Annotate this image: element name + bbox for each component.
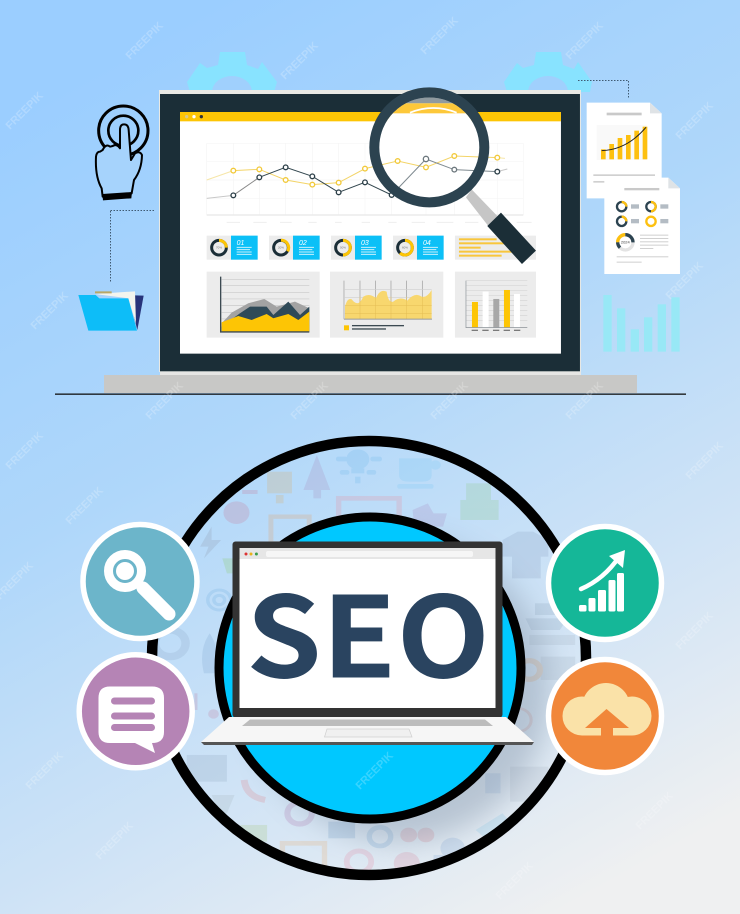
- magnifier frame and handle: [374, 92, 536, 264]
- watermarks: FREEPIK: [674, 100, 716, 142]
- summary card 3: 03: [361, 240, 369, 247]
- watermarks: FREEPIK: [4, 430, 46, 472]
- summary card 3: 50%: [340, 246, 346, 250]
- outer black ring: [152, 441, 586, 875]
- icon: printer: [328, 822, 355, 838]
- summary card 4: 60%: [402, 246, 408, 250]
- desk line: [55, 394, 686, 395]
- summary card 2: [269, 236, 320, 260]
- icon: person: [434, 838, 465, 865]
- summary card 4: 04: [423, 240, 431, 247]
- soft shadow of inner circle: [250, 538, 550, 842]
- icon: webcam: [155, 630, 186, 657]
- icon: shirt: [502, 532, 548, 578]
- SEO heading: SEO: [246, 548, 490, 710]
- watermarks: FREEPIK: [564, 20, 606, 62]
- icon: ship: [526, 604, 563, 630]
- screen: [240, 559, 496, 708]
- icon: green cup: [222, 558, 240, 573]
- badge: chat: [79, 655, 192, 768]
- summary card 3: [331, 236, 382, 260]
- watermarks: FREEPIK: [674, 610, 716, 652]
- icon: red circle: [394, 852, 420, 868]
- connector: laptop to document: [578, 80, 628, 98]
- badge: search: [83, 524, 197, 638]
- watermarks: FREEPIK: [494, 860, 536, 902]
- watermarks: FREEPIK: [4, 90, 46, 132]
- icon: orange frame: [282, 843, 324, 870]
- connector: hand to folder: [110, 210, 154, 283]
- inner blue circle: [219, 517, 521, 819]
- icon: lamp: [212, 795, 235, 813]
- summary card 5: horizontal bars: [455, 236, 536, 260]
- watermarks: FREEPIK: [664, 260, 706, 302]
- icon: tree: [303, 455, 330, 498]
- icon: rising bars and arrow: [579, 550, 625, 612]
- icon: lightning: [200, 527, 221, 558]
- watermarks: FREEPIK: [564, 380, 606, 422]
- icon: clock: [347, 851, 371, 872]
- icon: speech bubble: [98, 686, 164, 753]
- watermarks: FREEPIK: [124, 20, 166, 62]
- icon: cake: [240, 825, 267, 842]
- summary card 4: [393, 236, 444, 260]
- icon: phone: [244, 780, 265, 800]
- watermarks: FREEPIK: [419, 15, 461, 57]
- line chart: yellow series: [207, 154, 505, 187]
- faint icon pattern inside ring: [155, 449, 575, 875]
- dashboard title bar: [180, 112, 561, 121]
- summary card 1: 01: [237, 240, 245, 247]
- document: donut report: [604, 178, 680, 274]
- icon: grid: [510, 767, 548, 802]
- watermarks: FREEPIK: [64, 485, 106, 527]
- laptop screen with dashboard: [159, 90, 581, 372]
- icon: folder: [78, 291, 144, 331]
- icon: awning: [529, 635, 575, 680]
- icon: headset: [287, 803, 312, 824]
- icon: gift: [271, 517, 309, 543]
- icon: signal rings right: [504, 708, 531, 732]
- icon: light bulb: [336, 449, 382, 483]
- icon: rocket: [202, 633, 217, 673]
- badge: cloud upload: [548, 660, 662, 772]
- icon: bag: [187, 755, 227, 782]
- line chart grid: [207, 143, 532, 222]
- bar chart: columns: [455, 272, 536, 338]
- summary card 2: 20%: [278, 246, 284, 250]
- area chart: mountains: [207, 272, 320, 338]
- icon: tapping hand: [96, 106, 148, 200]
- watermarks: FREEPIK: [289, 380, 331, 422]
- area chart: yellow wave: [330, 272, 443, 338]
- watermarks: FREEPIK: [24, 750, 66, 792]
- laptop with SEO: [201, 542, 534, 745]
- document: donut report: 2024: [621, 240, 631, 245]
- icon: binoculars: [400, 828, 434, 842]
- icon: picture frame: [336, 496, 402, 516]
- icon: cup: [397, 458, 441, 489]
- icon: left gear: [187, 52, 277, 92]
- icon: magnifier: [108, 554, 169, 614]
- laptop keyboard deck: [201, 717, 534, 745]
- icon: camera: [369, 827, 391, 846]
- icon: bomb: [223, 490, 258, 524]
- summary card 2: 02: [299, 240, 307, 247]
- watermarks: FREEPIK: [94, 820, 136, 862]
- watermarks: FREEPIK: [29, 290, 71, 332]
- document: growth report: [587, 103, 662, 198]
- badge: growth chart: [548, 526, 662, 640]
- icon: right gear: [504, 52, 592, 92]
- line chart: dark series: [207, 156, 507, 198]
- laptop base: [104, 372, 637, 393]
- icon: map pin: [519, 661, 540, 679]
- icon: robot: [460, 483, 499, 520]
- bar chart: faint cyan bars: [603, 295, 680, 352]
- summary card 1: [207, 236, 258, 260]
- icon: signal rings: [208, 590, 231, 610]
- icon: box: [267, 472, 292, 503]
- bar chart: growth: [601, 127, 647, 159]
- magnifier lens glass: [380, 97, 479, 190]
- watermarks: FREEPIK: [429, 380, 471, 422]
- watermarks: FREEPIK: [684, 440, 726, 482]
- browser bar: [240, 548, 496, 559]
- watermarks: FREEPIK: [354, 750, 396, 792]
- icon: tag: [476, 814, 507, 836]
- watermarks: FREEPIK: [144, 380, 186, 422]
- laptop lid: [232, 542, 502, 718]
- icon: thumb up: [413, 503, 447, 527]
- icon: cloud with arrow: [562, 683, 652, 740]
- summary card 1: 70%: [216, 246, 222, 250]
- watermarks: FREEPIK: [634, 790, 676, 832]
- watermarks: FREEPIK: [279, 40, 321, 82]
- icon: tower: [485, 773, 501, 793]
- icon: cart: [194, 693, 219, 719]
